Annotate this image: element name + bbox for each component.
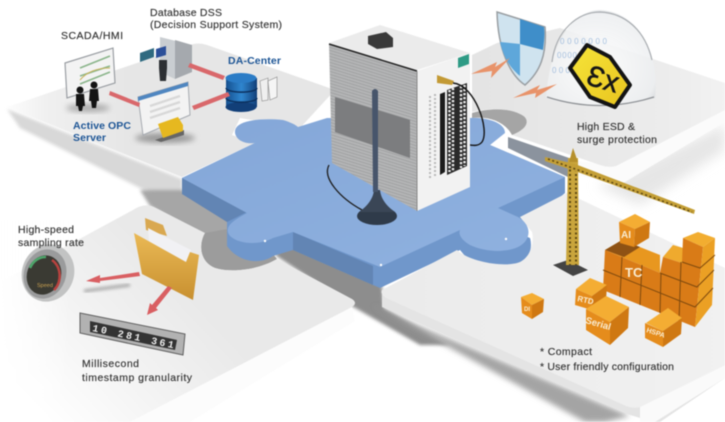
icon: crane [545,148,695,276]
panel front face [568,108,725,185]
chart: orange cube wall [603,232,715,327]
notch in panel [472,109,527,135]
LED column [430,94,435,178]
black bar [440,92,445,175]
puzzle: blue piece side [182,143,565,288]
panel: bottom-right configuration platform [382,193,725,422]
wall top faces [605,240,660,273]
icon: timestamp display [80,313,185,355]
label: High ESD: High ESD & [577,121,635,133]
cube: HSPA [645,308,682,347]
timestamp digits: 10 281 361 [91,324,175,352]
cube: RTD: RTD [577,294,595,306]
label: Millisecond: Millisecond [82,358,139,370]
binary digits: 0000000 [560,37,608,46]
cube: Serial: Serial [584,315,612,333]
binary digits: 0000 [557,51,578,60]
icon: dome [546,10,656,106]
cube: AI: AI [621,230,631,241]
gold connector [437,75,454,85]
icon: DA-Center database cylinder [226,73,277,112]
icon: operators [76,82,99,111]
person at server [159,60,167,81]
panel dark side [508,137,575,178]
wall front [603,238,703,327]
cube label TC: TC [625,265,643,280]
label: sampling rate: sampling rate [18,237,84,249]
binary digits: 000 [552,66,571,75]
label: timestamp granularity: timestamp granularity [82,372,193,384]
wall side [695,238,715,327]
label: High-speed: High-speed [18,224,74,236]
label: User friendly configuration: * User friendly configuration [540,361,674,373]
icon: Active OPC server screen [135,82,195,143]
cube: Serial [584,296,629,345]
binary digits [552,37,608,75]
puzzle: gray channels [140,190,630,422]
icon: high-speed gauge [14,237,82,309]
puzzle: blue shaded sides [182,178,373,285]
device left face [329,44,417,211]
device dark band [335,97,410,158]
cube: RTD [575,278,607,310]
device right face [417,53,470,211]
panel: bottom-left timing platform [0,205,355,422]
label: DA-Center: DA-Center [228,55,281,67]
device: antenna [357,89,397,225]
device: antenna cable right [453,83,484,145]
label: Compact: * Compact [540,346,592,358]
icon: shield [497,12,545,85]
cube: DI [521,293,544,319]
shadow under arrow [84,285,130,291]
panel: top-right protection platform [472,28,725,185]
ground shadow under right panel [598,124,725,205]
label: surge protection: surge protection [577,134,657,146]
label: Active OPC: Active OPC [73,120,131,132]
logo tag [458,54,469,68]
icon: Ex hexagon [570,45,630,107]
icon: Ex hexagon: Ɛx [583,60,623,100]
label: Decision Support System: (Decision Support System) [150,19,282,31]
cube: DI: DI [524,307,530,313]
icon: SCADA monitor [65,48,115,112]
icon: database server [140,37,192,81]
device: IO module [329,25,470,211]
panel: top-left SCADA platform [7,44,335,203]
label: Server: Server [73,132,106,144]
top connector [368,32,393,49]
icon: folder [134,218,199,300]
device top face [329,25,470,70]
arrows: folder outputs [86,272,172,315]
left edge fade [0,220,70,422]
arrows: data flow [109,63,230,110]
icons: lightning bolts [471,58,557,98]
cube: HSPA: HSPA [645,327,666,340]
label: Database DSS: Database DSS [150,7,222,19]
gauge label: Speed [37,283,53,289]
label: SCADA/HMI: SCADA/HMI [61,30,123,42]
terminal rows [447,83,467,175]
puzzle: blue piece top [182,118,565,267]
device: antenna cable left [327,165,362,210]
cube: AI [619,214,650,247]
